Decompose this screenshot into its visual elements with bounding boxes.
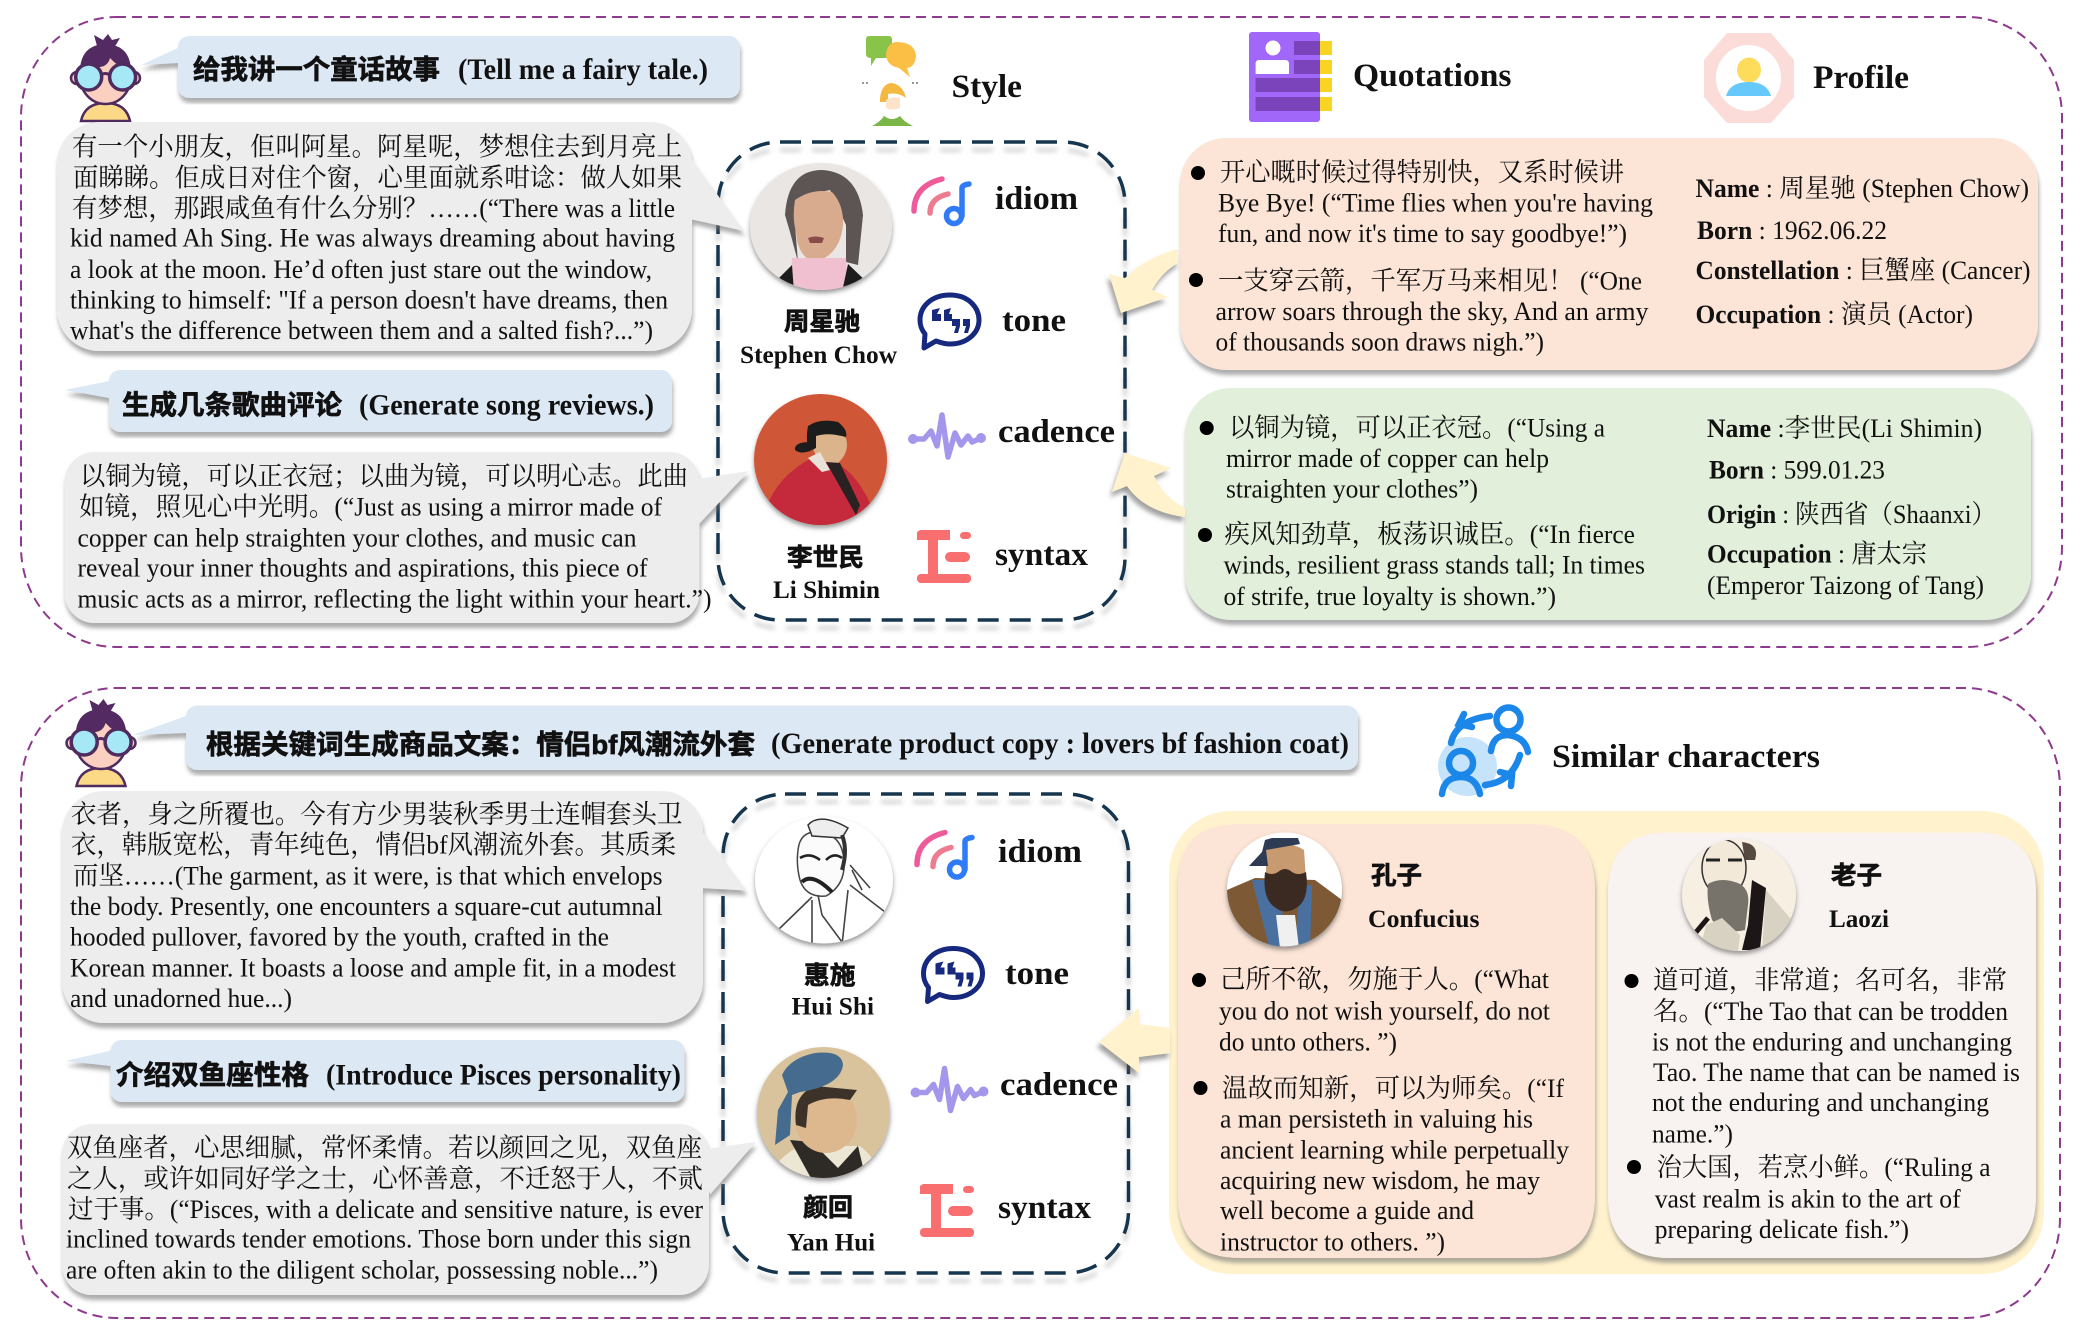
icon: cadence [908, 415, 986, 457]
quotations: Confucius [1192, 965, 1569, 1256]
profile: Stephen Chow: Constellation : 巨蟹座 (Cancer) [1696, 256, 2030, 285]
arrow: quotations to persona second [1112, 453, 1185, 517]
user prompt bubble: song reviews [65, 370, 672, 432]
response bubble: Stephen Chow story: a look at the moon. He’d often just stare out the window, [70, 255, 652, 284]
response bubble: Stephen Chow story: thinking to himself: "If a person doesn't have dreams, then [70, 286, 668, 314]
response bubble: Pisces personality: 双鱼座者，心思细腻，常怀柔情。若以颜回之见，双鱼座 [67, 1134, 702, 1162]
quotations: Confucius: a man persisteth in valuing his [1220, 1105, 1533, 1134]
profile: Li Shimin: Name :李世民(Li Shimin) [1707, 414, 1982, 443]
panel: Stephen Chow quotes and profile [1180, 138, 2038, 370]
quotations: Laozi [1624, 966, 2020, 1244]
response bubble: garment copy: Korean manner. It boasts a loose and ample fit, in a modest [70, 954, 677, 982]
label: idiom: idiom [998, 834, 1082, 870]
label: tone: tone [1002, 303, 1066, 339]
panel outline: bottom [21, 688, 2060, 1318]
response bubble: Li Shimin review: 如镜，照见心中光明。(“Just as using a mirror made of [79, 493, 662, 522]
panel outline: top [21, 17, 2062, 647]
quotations: Li Shimin: 疾风知劲草，板荡识诚臣。(“In fierce [1224, 520, 1635, 549]
quotations: Stephen Chow: fun, and now it's time to say goodbye!”) [1218, 219, 1627, 248]
name: Li Shimin [773, 544, 880, 604]
portrait: Yan Hui [755, 1045, 892, 1182]
portrait: Confucius [1225, 830, 1345, 950]
quotations: Laozi: 治大国，若烹小鲜。(“Ruling a [1656, 1153, 1991, 1182]
quotations: Laozi: 道可道，非常道；名可名，非常 [1653, 966, 2007, 995]
arrow: similar characters to persona [1099, 1008, 1170, 1073]
name: Hui Shi: Hui Shi [792, 994, 874, 1021]
name: Hui Shi [792, 962, 874, 1021]
profile: Stephen Chow: Occupation : 演员 (Actor) [1696, 300, 1973, 329]
profile: Stephen Chow [1696, 174, 2030, 329]
icon: idiom [914, 179, 969, 224]
portrait: Stephen Chow [748, 160, 894, 294]
icon: idiom [917, 832, 972, 877]
icon: quotations [1249, 32, 1332, 122]
name: Laozi [1829, 862, 1889, 933]
response bubble: Li Shimin review: copper can help straighten your clothes, and music can [78, 523, 636, 552]
profile: Li Shimin: Origin : 陕西省（Shaanxi） [1707, 500, 1996, 529]
panel: bottom similar character example [21, 688, 2060, 1318]
avatar: top user [71, 34, 140, 121]
quotations: Confucius: well become a guide and [1220, 1196, 1474, 1225]
name: Li Shimin: Li Shimin [773, 577, 880, 604]
response bubble: Li Shimin review: reveal your inner thoughts and aspirations, this piece of [78, 554, 648, 583]
name: Confucius: 孔子 [1371, 862, 1422, 890]
quotations: Li Shimin: of strife, true loyalty is shown.”) [1224, 582, 1556, 611]
quotations: Laozi: preparing delicate fish.”) [1655, 1215, 1909, 1244]
quotations: Confucius: do unto others. ”) [1219, 1028, 1397, 1057]
response bubble: Stephen Chow story: what's the difference between them and a salted fish?...”) [70, 316, 653, 345]
icon: syntax [917, 530, 971, 583]
quotations: Laozi: name.”) [1652, 1120, 1733, 1148]
quotations: Confucius: acquiring new wisdom, he may [1220, 1166, 1540, 1195]
response bubble: garment copy [62, 791, 746, 1023]
quotations: Laozi: not the enduring and unchanging [1652, 1088, 1989, 1117]
response bubble: Pisces personality: are often akin to the diligent scholar, possessing noble...”) [66, 1256, 658, 1284]
quotations: Laozi: is not the enduring and unchanging [1652, 1028, 2012, 1057]
card: Confucius [1178, 824, 1595, 1258]
quotations: Confucius: ancient learning while perpetually [1220, 1136, 1569, 1165]
portrait: Hui Shi [752, 814, 896, 946]
response bubble: garment copy: 而坚……(The garment, as it were, is that which envelops [73, 862, 663, 891]
response bubble: Stephen Chow story: 面睇睇。佢成日对住个窗，心里面就系咁谂：做人如果 [73, 163, 682, 192]
quotations: Confucius: 己所不欲，勿施于人。(“What [1220, 965, 1550, 994]
icon: profile [1704, 33, 1794, 123]
user prompt bubble: fairy tale: 给我讲一个童话故事 [193, 55, 440, 85]
panel: Li Shimin quotes and profile [1185, 388, 2031, 620]
response bubble: garment copy: 衣，韩版宽松，青年纯色，情侣bf风潮流外套。其质柔 [71, 831, 676, 860]
heading: Style: Style [952, 69, 1022, 105]
card: Laozi [1608, 832, 2036, 1258]
quotations: Confucius: 温故而知新，可以为师矣。(“If [1222, 1074, 1564, 1103]
portrait: Laozi [1680, 837, 1798, 953]
user prompt bubble: product copy: (Generate product copy : lovers bf fashion coat) [771, 727, 1349, 760]
quotations: Laozi: Tao. The name that can be named is [1653, 1058, 2020, 1087]
icon: syntax [920, 1184, 974, 1237]
name: Stephen Chow [740, 308, 897, 369]
icon: cadence [910, 1068, 988, 1110]
response bubble: garment copy: the body. Presently, one encounters a square-cut autumnal [70, 892, 663, 921]
user prompt bubble: Pisces: 介绍双鱼座性格 [116, 1060, 309, 1090]
profile: Stephen Chow: Born : 1962.06.22 [1697, 216, 1887, 245]
response bubble: Li Shimin review: music acts as a mirror, reflecting the light within your heart.”) [78, 584, 712, 613]
quotations: Confucius: you do not wish yourself, do not [1219, 997, 1551, 1026]
response bubble: Stephen Chow story: kid named Ah Sing. He was always dreaming about having [70, 224, 675, 253]
user prompt bubble: product copy [133, 706, 1358, 770]
heading: Profile: Profile [1813, 60, 1909, 96]
label: cadence: cadence [998, 414, 1115, 450]
label: idiom: idiom [995, 181, 1078, 217]
profile: Li Shimin: Occupation : 唐太宗 [1707, 540, 1927, 569]
quotations: Li Shimin: straighten your clothes”) [1226, 474, 1478, 504]
icon: similar characters [1438, 708, 1528, 796]
response bubble: Pisces personality [62, 1124, 756, 1295]
portrait: Li Shimin [752, 392, 890, 530]
user prompt bubble: fairy tale: (Tell me a fairy tale.) [458, 53, 708, 86]
user prompt bubble: product copy: 根据关键词生成商品文案：情侣bf风潮流外套 [206, 730, 755, 760]
profile: Li Shimin: (Emperor Taizong of Tang) [1707, 571, 1984, 600]
quotations: Stephen Chow: arrow soars through the sky, And an army [1216, 297, 1648, 326]
dashed style box: top [718, 142, 1125, 620]
avatar: bottom user [66, 699, 136, 786]
response bubble: Stephen Chow story [57, 122, 744, 351]
response bubble: Pisces personality: 之人，或许如同好学之士，心怀善意，不迁怒于人，不贰 [67, 1164, 703, 1193]
name: Confucius [1368, 862, 1480, 933]
profile: Li Shimin: Born : 599.01.23 [1709, 456, 1885, 484]
name: Yan Hui [787, 1194, 875, 1256]
name: Laozi: Laozi [1829, 906, 1889, 933]
response bubble: Stephen Chow story: 有一个小朋友，佢叫阿星。阿星呢，梦想住去到月亮上 [72, 133, 682, 162]
user prompt bubble: song reviews: 生成几条歌曲评论 [122, 390, 342, 420]
response bubble: Stephen Chow story: 有梦想，那跟咸鱼有什么分别？……(“There was a little [72, 194, 675, 223]
quotations: Stephen Chow [1189, 158, 1653, 357]
name: Li Shimin: 李世民 [787, 544, 864, 572]
response bubble: Pisces personality: 过于事。(“Pisces, with a delicate and sensitive nature, is ever [68, 1195, 703, 1224]
user prompt bubble: Pisces: (Introduce Pisces personality) [326, 1058, 681, 1092]
label: cadence: cadence [1000, 1067, 1118, 1103]
icon: tone [920, 295, 979, 348]
label: syntax: syntax [995, 537, 1089, 573]
quotations: Li Shimin: mirror made of copper can help [1226, 444, 1549, 473]
response bubble: garment copy: and unadorned hue...) [70, 984, 292, 1013]
quotations: Laozi: 名。(“The Tao that can be trodden [1653, 997, 2008, 1026]
quotations: Li Shimin: winds, resilient grass stands tall; In times [1224, 551, 1645, 580]
panel: top persona example [21, 17, 2062, 647]
icon: tone [924, 948, 982, 1002]
quotations: Stephen Chow: 一支穿云箭，千军万马来相见！ (“One [1218, 267, 1642, 296]
name: Stephen Chow: 周星驰 [784, 308, 860, 336]
name: Yan Hui: 颜回 [803, 1194, 853, 1222]
name: Confucius: Confucius [1368, 906, 1480, 933]
user prompt bubble: fairy tale [141, 36, 740, 98]
name: Stephen Chow: Stephen Chow [740, 342, 897, 369]
quotations: Laozi: vast realm is akin to the art of [1655, 1185, 1961, 1214]
label: tone: tone [1005, 956, 1069, 992]
dashed style box: bottom [723, 794, 1128, 1273]
label: syntax: syntax [998, 1190, 1092, 1226]
heading: Quotations: Quotations [1353, 58, 1512, 94]
panel: similar characters background [1169, 811, 2044, 1274]
name: Yan Hui: Yan Hui [787, 1230, 875, 1256]
response bubble: Li Shimin review: 以铜为镜，可以正衣冠；以曲为镜，可以明心志。此曲 [80, 462, 688, 491]
quotations: Li Shimin [1198, 414, 1645, 611]
quotations: Stephen Chow: of thousands soon draws nigh.”) [1216, 328, 1544, 357]
response bubble: garment copy: 衣者，身之所覆也。今有方少男装秋季男士连帽套头卫 [71, 800, 682, 829]
quotations: Stephen Chow: Bye Bye! (“Time flies when you're having [1218, 189, 1653, 218]
profile: Stephen Chow: Name : 周星驰 (Stephen Chow) [1696, 174, 2029, 203]
name: Hui Shi: 惠施 [804, 962, 856, 990]
heading: Similar characters: Similar characters [1552, 739, 1820, 775]
quotations: Confucius: instructor to others. ”) [1220, 1228, 1445, 1256]
icon: style [862, 36, 918, 126]
quotations: Li Shimin: 以铜为镜，可以正衣冠。(“Using a [1229, 414, 1605, 442]
response bubble: garment copy: hooded pullover, favored by the youth, crafted in the [70, 923, 609, 952]
user prompt bubble: song reviews: (Generate song reviews.) [359, 388, 654, 422]
user prompt bubble: Pisces [65, 1040, 684, 1102]
quotations: Stephen Chow: 开心嘅时候过得特别快，又系时候讲 [1220, 158, 1624, 187]
arrow: quotations to persona top [1109, 249, 1178, 313]
profile: Li Shimin [1707, 414, 1996, 600]
name: Laozi: 老子 [1831, 862, 1882, 890]
response bubble: Pisces personality: inclined towards tender emotions. Those born under this sign [66, 1225, 691, 1254]
response bubble: Li Shimin review [64, 452, 749, 623]
